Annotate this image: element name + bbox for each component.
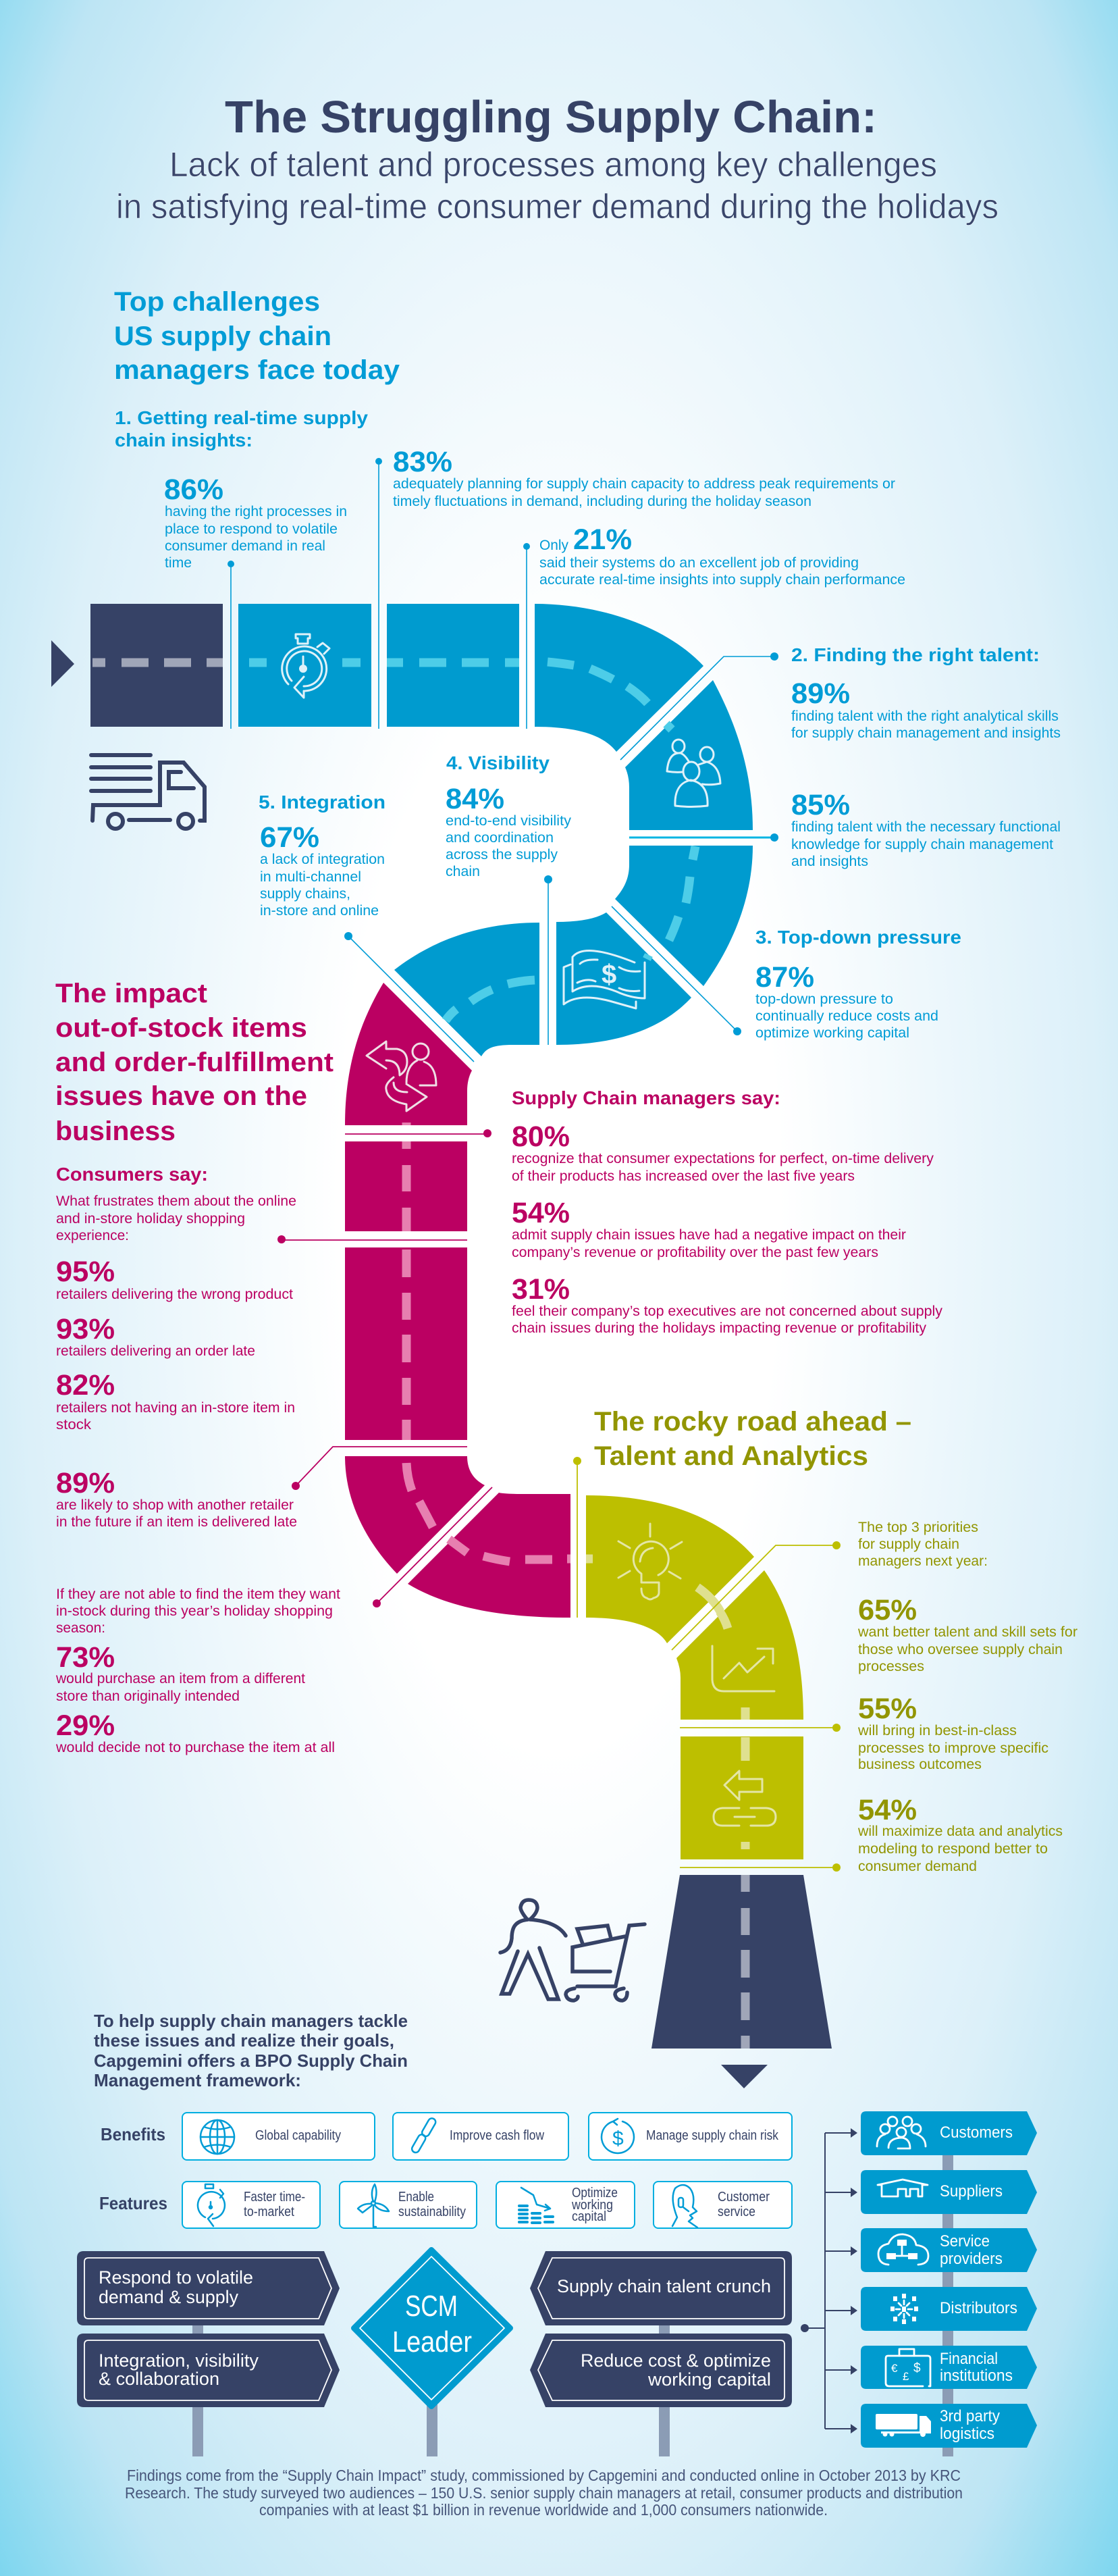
road: olive segments [586,1495,803,1859]
heading: the impact [55,979,334,1146]
stat: 54% priorities [857,1794,1063,1874]
heading: the impact: issues have on the [55,1081,307,1111]
stat: 29%: 29% [56,1709,115,1742]
icon: returning shopper [367,1041,436,1111]
feature: faster time-to-market [182,2182,320,2228]
feature: customer service: Customer [718,2190,770,2205]
stat: 31%: chain issues during the holidays impacting revenue or profitability [512,1320,926,1336]
benefit: manage supply chain risk: $ [612,2128,624,2150]
sign: respond to volatile demand: demand & supply [99,2287,238,2307]
stat: 85% talent: 85% [791,789,850,821]
stat: 80%: recognize that consumer expectations for perfect, on-time delivery [512,1151,934,1166]
stat: 89% consumers: in the future if an item is delivered late [56,1514,297,1530]
feature: optimize working capital: capital [572,2209,606,2224]
stat: 89% talent: 89% [791,677,850,710]
stat: 55%: will bring in best-in-class [857,1723,1017,1738]
stat: visibility: 84% [446,783,504,815]
stakeholder: service providers: providers [940,2250,1003,2268]
stakeholder: suppliers [861,2170,1037,2214]
stat: top-down pressure: 3. Top-down pressure [755,927,961,948]
stat: integration: in multi-channel [260,869,361,885]
stat: 86%: consumer demand in real [165,538,325,554]
stat: 73% [55,1641,305,1704]
stat: 89% talent: for supply chain management and insights [791,725,1061,741]
heading: supply chain managers say: Supply Chain managers say: [512,1087,780,1108]
stat: 95% [56,1256,293,1302]
stat: 86%: time [165,555,192,571]
stat: 54% managers: company’s revenue or profitability over the past few years [512,1245,878,1260]
stat: 85% talent [791,789,1061,869]
stat: 73%: would purchase an item from a different [55,1671,305,1686]
stat: 54% priorities: modeling to respond better to [858,1841,1048,1857]
stat: 93%: 93% [56,1313,115,1345]
stat: 21%: said their systems do an excellent job of providing [539,555,859,571]
stakeholder: service providers: Service [940,2232,990,2250]
stakeholder: distributors [861,2287,1037,2331]
sign: talent crunch [530,2251,792,2325]
text: top 3 priorities: managers next year: [858,1553,988,1569]
icon: talent group [667,740,720,806]
footer note: companies with at least $1 billion in revenue worldwide and 1,000 consumers nationwide. [259,2501,828,2519]
stat: 29%: would decide not to purchase the item at all [55,1740,335,1755]
sign: SCM leader [354,2250,510,2406]
stat: integration: 67% [260,821,319,854]
stat: 54% managers: 54% [512,1197,570,1229]
heading: top challenges: Top challenges [114,287,320,317]
stat: 89% talent [791,677,1061,741]
stat: integration: in-store and online [260,903,379,919]
heading: consumers say [56,1164,296,1243]
stakeholder: 3rd party logistics [861,2404,1037,2448]
feature: customer service [654,2182,792,2228]
stakeholder: customers [861,2111,1037,2155]
heading: the impact: out-of-stock items [55,1013,307,1043]
stat: integration: 5. Integration [259,792,385,813]
stat: visibility: across the supply [446,847,558,862]
heading: consumers say: experience: [56,1228,129,1243]
stat: 82%: retailers not having an in-store item in [56,1400,295,1416]
icon: lightbulb [618,1524,682,1599]
heading: challenge 1: chain insights: [115,430,252,450]
stat: visibility: and coordination [446,830,554,846]
text: capgemini intro: these issues and realize their goals, [94,2030,394,2051]
stat: visibility [446,752,572,879]
stat: 89% consumers [56,1467,297,1530]
footer note: Findings come from the “Supply Chain Impact” study, commissioned by Capgemini and conducted online in October 2013 by KRC [127,2467,961,2484]
text: top 3 priorities [858,1520,988,1569]
stat: 21%: 21% [573,523,632,556]
stat: integration [259,792,385,919]
icon: shopper with cart [500,1900,645,2001]
stakeholder: financial institutions: £ [903,2370,909,2383]
feature: enable sustainability [340,2182,477,2228]
stat: 82% [56,1369,295,1433]
stakeholder: financial institutions: $ [913,2361,921,2375]
stat: 31%: 31% [512,1273,570,1306]
stat: 82%: stock [56,1417,92,1433]
label: benefits: Benefits [101,2124,165,2144]
icon: stopwatch [282,634,329,698]
connector lines: magenta [277,1129,492,1607]
heading: top challenges: US supply chain [114,321,331,351]
road: navy end segment [651,1875,832,2049]
icon: growth chart [712,1646,774,1691]
benefit: manage supply chain risk [589,2113,792,2160]
title: The Struggling Supply Chain: [225,92,877,143]
stat: top-down pressure: optimize working capital [755,1025,909,1041]
heading: top challenges [114,287,400,385]
feature: enable sustainability: sustainability [398,2205,466,2219]
stakeholder: service providers [861,2228,1037,2272]
stat: 80% [512,1120,934,1184]
sign: SCM leader: SCM [405,2290,458,2323]
stat: 21%: accurate real-time insights into supply chain performance [539,572,905,588]
stakeholder: 3rd party logistics: logistics [940,2425,994,2443]
stat: visibility: chain [446,864,480,879]
connector lines: blue [228,458,778,1062]
stakeholder: financial institutions [861,2346,1037,2389]
stat: 54% managers: admit supply chain issues have had a negative impact on their [512,1227,906,1243]
stat: 65%: want better talent and skill sets for [857,1624,1077,1640]
feature: optimize working capital [496,2182,635,2228]
stakeholder: 3rd party logistics: 3rd party [940,2407,1000,2425]
stat: 86% [164,473,347,571]
heading: challenge 1: 1. Getting real-time supply [115,407,368,428]
stat: 86%: place to respond to volatile [165,521,338,537]
heading: challenge 1 [115,407,368,450]
stat: 55%: processes to improve specific [858,1741,1048,1756]
stat: 65%: processes [858,1659,924,1674]
stat: 54% priorities: will maximize data and analytics [857,1824,1063,1839]
feature: faster time-to-market: to-market [244,2205,294,2219]
text: out of stock intro: season: [56,1620,105,1636]
sign: reduce cost: working capital [647,2369,771,2390]
road: magenta dashes [406,1123,570,1562]
connector: stakeholder bracket [801,2128,857,2433]
heading: top challenges: managers face today [114,355,400,385]
stat: integration: supply chains, [260,886,350,902]
stat: 85% talent: knowledge for supply chain management [791,837,1053,852]
title: in satisfying real-time consumer demand during the holidays [116,187,999,226]
stat: 31% [512,1273,943,1336]
label: features: Features [99,2193,167,2213]
sign: integration visibility collaboration [77,2334,340,2407]
stat: 83%: timely fluctuations in demand, including during the holiday season [393,494,811,509]
stat: top-down pressure [755,927,961,1041]
arrow: road start [51,640,74,687]
benefit: improve cash flow: Improve cash flow [450,2128,544,2143]
text: out of stock intro [56,1587,340,1636]
stat: 86%: having the right processes in [165,504,347,519]
stat: 89% consumers: are likely to shop with another retailer [56,1497,294,1513]
text: capgemini intro [94,2011,408,2090]
stat: 80%: of their products has increased over the last five years [512,1168,855,1184]
heading: rocky road ahead: Talent and Analytics [594,1441,868,1471]
sign: talent crunch: Supply chain talent crunch [557,2276,771,2296]
sign: reduce cost [530,2334,792,2407]
stakeholder: financial institutions: Financial [940,2350,998,2368]
stat: 54% priorities: 54% [858,1794,917,1826]
stat: visibility: end-to-end visibility [446,813,572,829]
stat: 21% [539,523,905,588]
stat: integration: a lack of integration [260,852,385,867]
heading: rocky road ahead: The rocky road ahead – [594,1407,911,1437]
text: top 3 priorities: The top 3 priorities [858,1520,978,1535]
icon: delivery truck [91,755,205,829]
benefit: global capability: Global capability [255,2128,341,2143]
feature: customer service: service [718,2205,755,2219]
stakeholder: suppliers: Suppliers [940,2182,1003,2200]
sign: respond to volatile demand [77,2251,340,2325]
benefit: global capability [182,2113,375,2160]
stat: 85% talent: and insights [791,854,868,869]
stat: 93%: retailers delivering an order late [56,1343,255,1359]
feature: optimize working capital: working [571,2198,613,2213]
stat: 54% priorities: consumer demand [858,1859,977,1874]
text: capgemini intro: Management framework: [94,2070,301,2090]
heading: the impact: and order-fulfillment [55,1048,334,1077]
stakeholder: customers: Customers [940,2123,1013,2142]
stat: 73%: store than originally intended [56,1689,240,1704]
stat: 86%: 86% [164,473,223,506]
stat: 89% talent: finding talent with the right analytical skills [791,709,1059,724]
icon: arrow and chain link [714,1771,776,1826]
heading: consumers say: and in-store holiday shopping [56,1211,245,1227]
text: out of stock intro: If they are not able to find the item they want [56,1587,340,1602]
stat: 55%: business outcomes [858,1757,982,1772]
stat: 89% consumers: 89% [56,1467,115,1499]
stat: 83%: adequately planning for supply chain capacity to address peak requirements or [393,476,895,492]
feature: faster time-to-market: Faster time- [244,2190,305,2205]
road: blue dashes [249,662,695,1021]
road: navy start segment [90,604,223,727]
stat: 21%: Only [539,538,568,553]
title [116,92,999,226]
icon: money bill: $ [602,960,616,989]
stakeholder: financial institutions: institutions [940,2367,1013,2385]
connector lines: olive [573,1457,841,1872]
title: Lack of talent and processes among key challenges [169,145,937,184]
text: capgemini intro: To help supply chain managers tackle [94,2011,408,2031]
benefit: manage supply chain risk: Manage supply chain risk [646,2128,779,2143]
stat: 93% [56,1313,255,1359]
heading: consumers say: Consumers say: [56,1164,208,1185]
stat: 65%: those who oversee supply chain [858,1642,1063,1657]
sign: integration visibility collaboration: Integration, visibility [99,2350,259,2371]
heading: rocky road ahead [594,1407,911,1471]
stat: 95%: 95% [56,1256,115,1288]
feature: enable sustainability: Enable [398,2190,434,2205]
footer note [125,2467,963,2519]
stat: 55% [857,1693,1048,1772]
stakeholder: financial institutions: € [891,2362,898,2375]
sign: SCM leader: Leader [392,2325,472,2359]
stakeholder: distributors: Distributors [940,2299,1017,2317]
stat: top-down pressure: continually reduce costs and [755,1008,938,1024]
stat: 55%: 55% [858,1693,917,1725]
heading: the impact: The impact [55,979,207,1008]
icon: money bill [564,951,645,1008]
sign: respond to volatile demand: Respond to volatile [99,2267,253,2288]
stat: 80%: 80% [512,1120,570,1153]
stat: 29% [55,1709,335,1755]
road: olive dashes [586,1559,745,1849]
text: capgemini intro: Capgemini offers a BPO Supply Chain [94,2051,408,2071]
sign poles [192,2148,953,2456]
heading: consumers say: What frustrates them about the online [56,1193,296,1209]
feature: optimize working capital: Optimize [572,2186,618,2200]
stat: 54% managers [512,1197,906,1260]
stat: 65%: 65% [858,1594,917,1626]
sign: reduce cost: Reduce cost & optimize [581,2350,771,2371]
heading: the impact: business [55,1116,176,1146]
benefit: improve cash flow [393,2113,568,2160]
sign: integration visibility collaboration: & collaboration [99,2369,219,2389]
stat: 65% [857,1594,1077,1674]
stat: top-down pressure: 87% [755,961,814,994]
stat: 85% talent: finding talent with the necessary functional [791,819,1061,835]
stat: 83% [393,446,895,509]
stat: visibility: 4. Visibility [446,752,550,773]
stat: 73%: 73% [56,1641,115,1674]
arrow: road end [721,2065,768,2088]
stat: 82%: 82% [56,1369,115,1401]
stat: 31%: feel their company’s top executives are not concerned about supply [512,1304,943,1319]
stat: 83%: 83% [393,446,452,478]
text: top 3 priorities: for supply chain [858,1537,959,1552]
heading: challenge 2: 2. Finding the right talent: [791,644,1040,665]
text: out of stock intro: in-stock during this year’s holiday shopping [56,1603,333,1619]
stat: 95%: retailers delivering the wrong product [56,1287,293,1302]
road: blue segments [238,604,753,1056]
stat: top-down pressure: top-down pressure to [755,991,893,1007]
footer note: Research. The study surveyed two audiences – 150 U.S. senior supply chain managers at retail, consumer products and distribution [125,2484,963,2502]
road: magenta segments [345,983,570,1618]
